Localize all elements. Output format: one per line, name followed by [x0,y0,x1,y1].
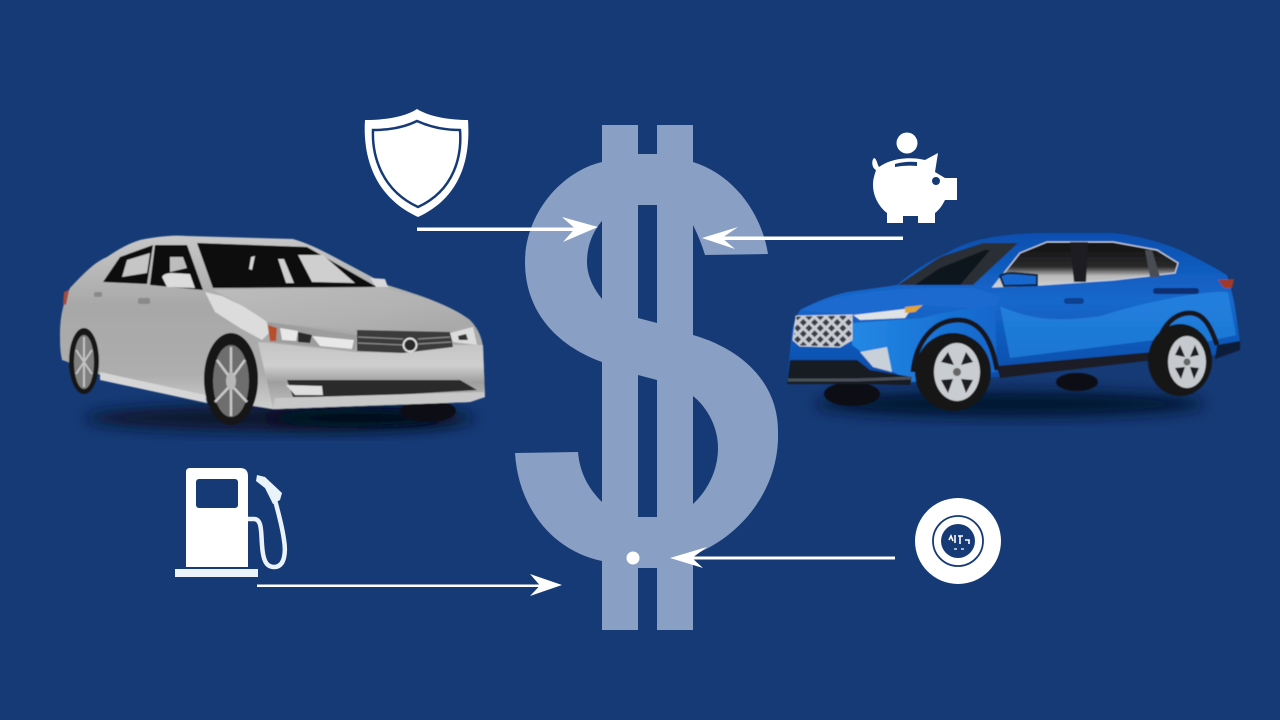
car: blue crossover [787,233,1240,417]
dollar sign dot [626,552,640,564]
crossover side intake [860,347,892,372]
sedan grille [357,330,453,353]
dollar sign [515,125,778,630]
sedan front bumper [258,342,485,409]
icon: fuel pump [175,468,285,577]
sedan mirrors [162,273,195,288]
crossover grille [793,315,852,347]
sedan tail light [63,290,69,305]
sedan headlight [267,322,357,350]
sedan hood [213,287,470,332]
crossover rear wheel [1148,324,1212,396]
icon: coin [915,498,1001,584]
icon: shield [365,109,468,217]
sedan front wheel [204,333,258,425]
crossover hood highlight [800,288,1000,315]
crossover door handle and tail light [1064,298,1084,304]
sedan rear wheel [69,328,99,394]
crossover headlight [853,308,912,320]
crossover wheel arches [913,313,1217,372]
sedan right headlight [450,327,477,345]
arrow: shield to dollar [417,217,598,242]
crossover front fender [852,305,997,382]
crossover lower bumper [787,360,912,385]
sedan rear side window [103,245,153,284]
sedan door handles [94,292,102,297]
sedan shoulder highlight [205,292,272,340]
car: silver sedan [60,236,485,431]
crossover front wheel [915,333,991,411]
sedan badge [404,338,416,352]
sedan front side window [150,245,203,290]
crossover door highlight [1000,292,1236,358]
crossover side windows [993,242,1178,287]
sedan windshield [197,243,377,288]
crossover mirror [1000,273,1037,286]
arrow: piggy bank to dollar [702,227,903,249]
sedan sill [100,372,207,403]
arrow: fuel pump to dollar [257,574,562,596]
icon: piggy bank [872,132,957,223]
crossover windshield [898,243,1018,285]
arrow: coin to dollar [670,547,895,568]
crossover rocker panel [997,352,1153,378]
sedan lower intake [287,380,477,397]
